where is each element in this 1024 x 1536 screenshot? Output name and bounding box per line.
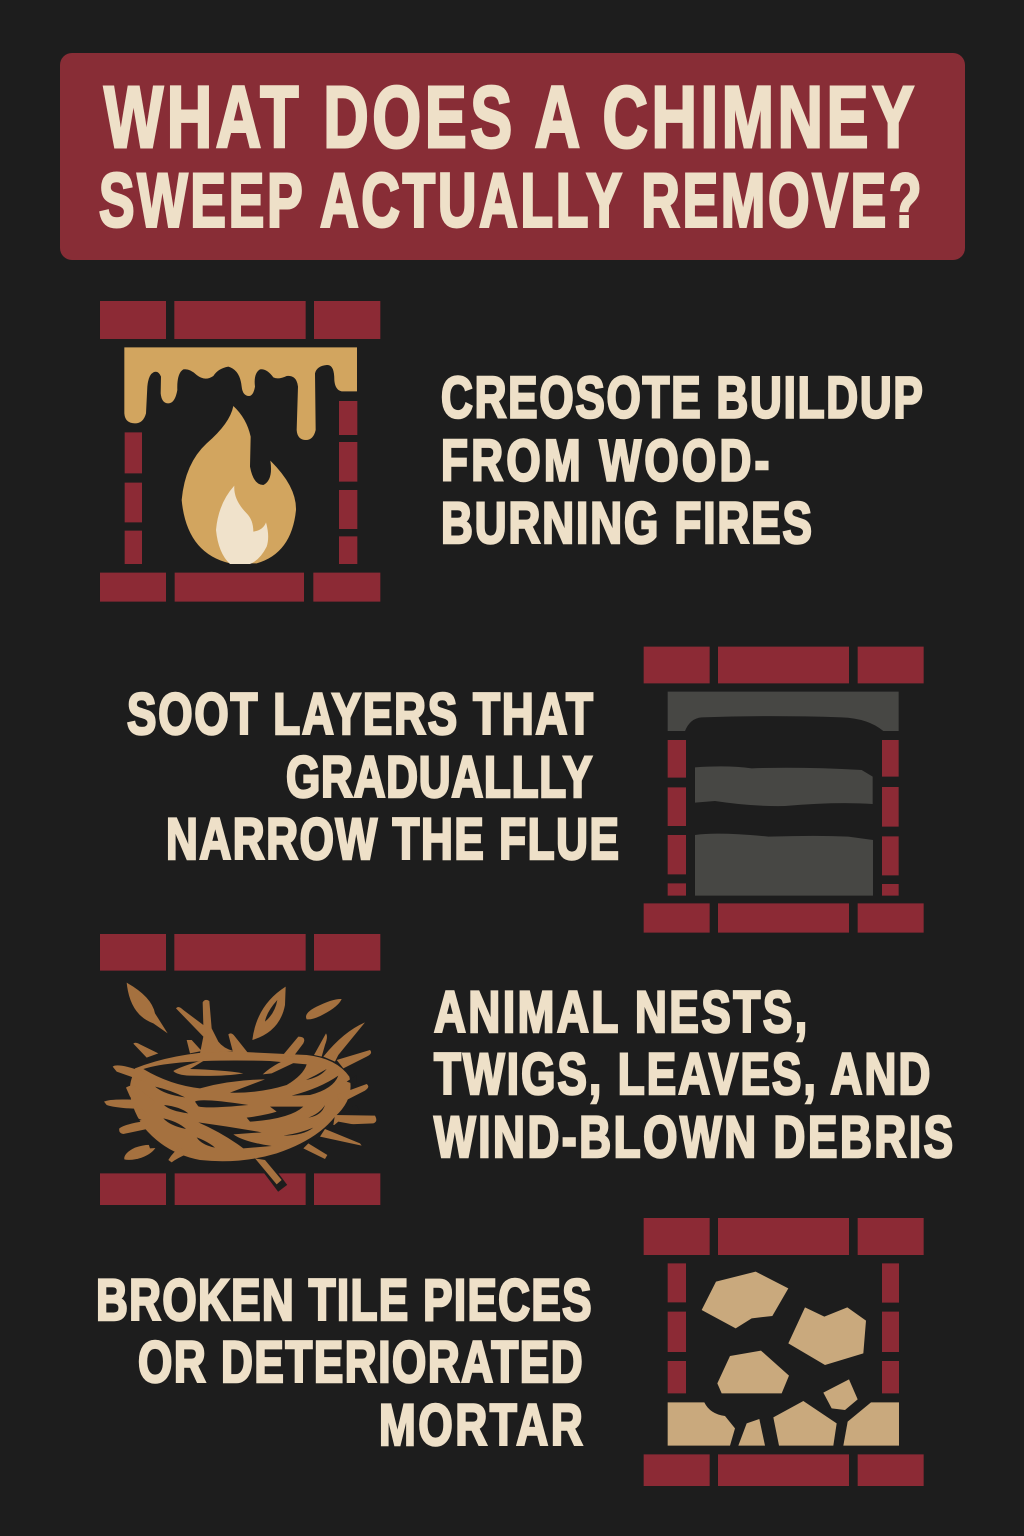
- text: soot: NARROW THE FLUE: [166, 806, 619, 871]
- text: creosote: FROM WOOD-: [441, 428, 769, 493]
- text: creosote: BURNING FIRES: [441, 490, 812, 555]
- text: soot: SOOT LAYERS THAT: [127, 681, 593, 746]
- text: nests: [434, 979, 953, 1169]
- text: soot: [127, 681, 619, 871]
- title banner: [60, 53, 965, 260]
- title banner: WHAT DOES A CHIMNEY: [104, 69, 914, 167]
- icon: broken tile pieces in brick frame: [644, 1218, 924, 1486]
- text: creosote: [441, 365, 923, 555]
- text: nests: WIND-BLOWN DEBRIS: [434, 1104, 953, 1169]
- text: broken tile: MORTAR: [379, 1392, 583, 1457]
- text: soot: GRADUALLLY: [286, 744, 592, 809]
- title banner: SWEEP ACTUALLY REMOVE?: [99, 158, 921, 243]
- text: creosote: CREOSOTE BUILDUP: [441, 365, 923, 430]
- text: nests: ANIMAL NESTS,: [434, 979, 807, 1044]
- icon: nest with twigs and leaves in brick frame: [100, 934, 380, 1205]
- text: nests: TWIGS, LEAVES, AND: [434, 1041, 930, 1106]
- text: broken tile: BROKEN TILE PIECES: [96, 1267, 592, 1332]
- icon: creosote dripping over flame in brick frame: [100, 301, 380, 602]
- text: broken tile: OR DETERIORATED: [138, 1329, 583, 1394]
- icon: soot layers in brick frame: [644, 647, 924, 933]
- text: broken tile: [96, 1267, 592, 1457]
